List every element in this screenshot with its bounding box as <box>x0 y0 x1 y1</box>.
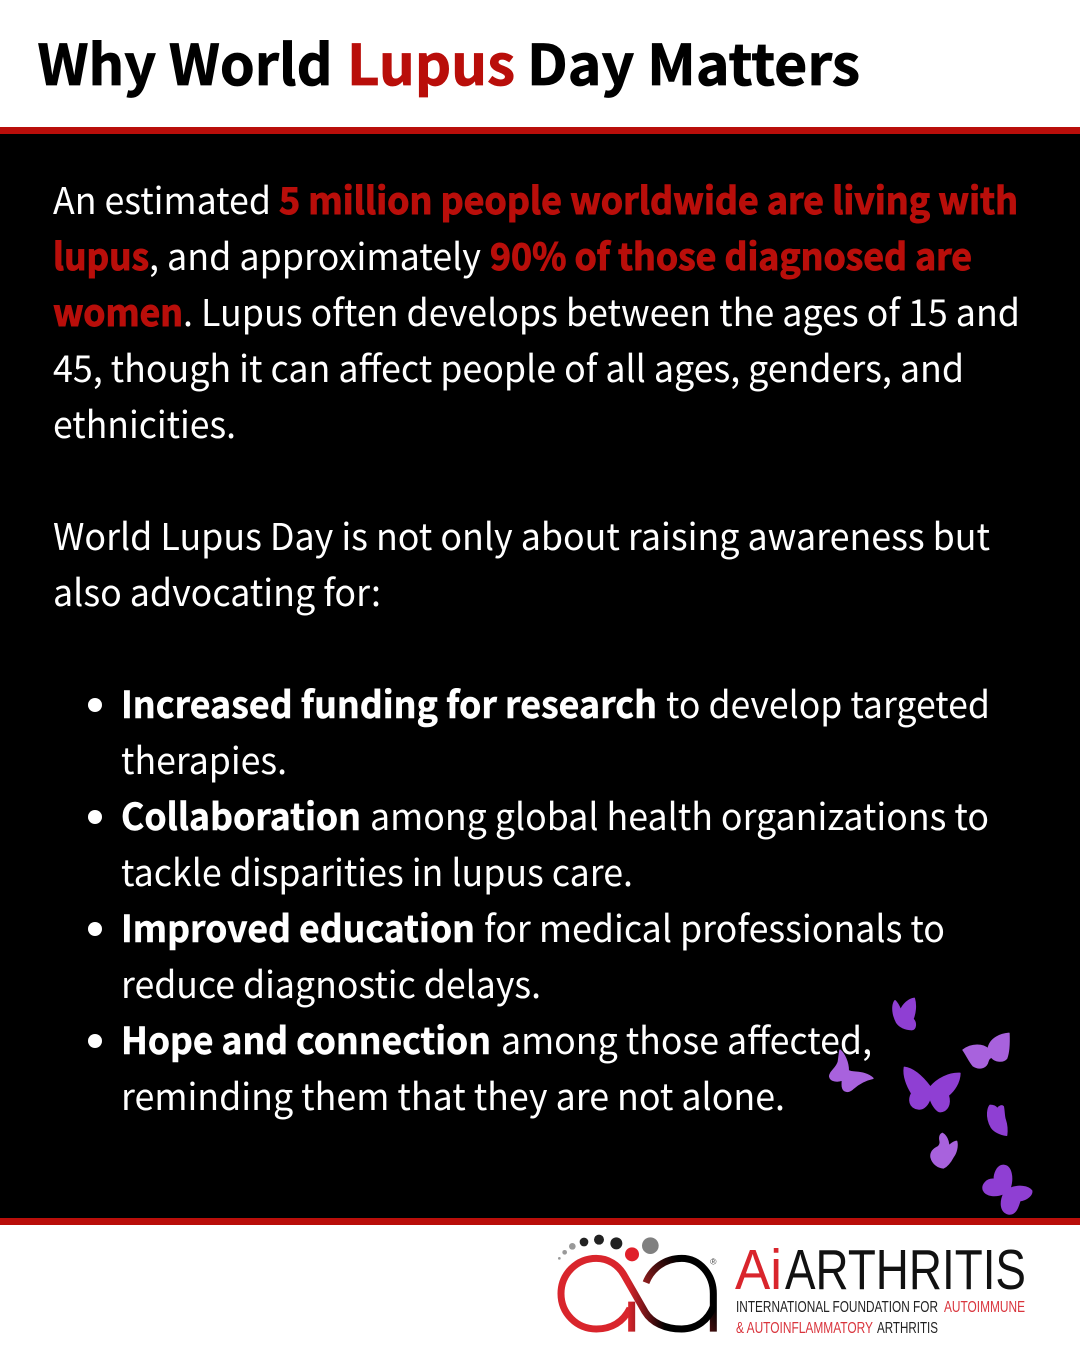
logo wordmark: INTERNATIONAL FOUNDATION FOR <box>736 1299 938 1316</box>
bullet: research funding: to develop targeted <box>666 675 990 729</box>
butterfly: bottom right <box>983 1165 1032 1214</box>
text block: lupus statistics: lupus <box>53 227 149 281</box>
butterfly: upper right <box>963 1033 1009 1068</box>
text block: lupus statistics: 90% of those diagnosed are <box>490 227 972 281</box>
text block: lupus statistics: ethnicities. <box>53 395 236 449</box>
bullet: education: for medical professionals to <box>484 899 945 953</box>
bullet: collaboration: tackle disparities in lupus care. <box>121 843 633 897</box>
text block: lupus statistics: , and approximately <box>149 227 481 281</box>
bullet: education <box>88 899 945 1009</box>
bullet: collaboration <box>88 787 989 897</box>
logo mark: infinity loop and dots: ® <box>710 1257 717 1267</box>
logo wordmark: ARTHRITIS <box>785 1238 1026 1302</box>
title <box>38 21 860 102</box>
logo wordmark: Ai <box>735 1238 782 1302</box>
bullet: research funding <box>88 675 990 785</box>
bullet list <box>88 675 990 1121</box>
bullet: collaboration: Collaboration <box>121 787 361 841</box>
logo wordmark: AUTOIMMUNE <box>944 1299 1025 1316</box>
butterfly: centre <box>904 1067 960 1112</box>
title: Day Matters <box>527 21 860 102</box>
logo mark: infinity loop and dots <box>558 1235 717 1332</box>
title: Why World <box>38 21 332 102</box>
text block: lupus statistics: 5 million people worldwide are living with <box>279 171 1018 225</box>
text block: advocacy intro: also advocating for: <box>53 563 381 617</box>
icon: purple butterflies <box>830 998 1032 1214</box>
text block: lupus statistics: An estimated <box>53 171 271 225</box>
logo wordmark: ARTHRITIS <box>877 1320 938 1337</box>
title: Lupus <box>347 21 515 102</box>
bullet: research funding: therapies. <box>121 731 287 785</box>
text block: lupus statistics <box>53 171 1020 449</box>
logo wordmark <box>735 1238 1026 1337</box>
butterfly: left <box>830 1050 873 1091</box>
butterfly: top <box>893 998 915 1030</box>
butterfly: right <box>988 1105 1007 1135</box>
bullet: hope and connection: among those affected, <box>501 1011 872 1065</box>
bullet: education: Improved education <box>121 899 475 953</box>
text block: lupus statistics: 45, though it can affect people of all ages, genders, and <box>53 339 964 393</box>
logo wordmark: & AUTOINFLAMMATORY <box>736 1320 873 1337</box>
bullet: education: reduce diagnostic delays. <box>121 955 541 1009</box>
bullet: hope and connection <box>88 1011 872 1121</box>
butterfly: lower middle <box>931 1133 957 1168</box>
bullet: collaboration: among global health organizations to <box>370 787 989 841</box>
bullet: research funding: Increased funding for research <box>121 675 657 729</box>
bullet: hope and connection: Hope and connection <box>121 1011 491 1065</box>
text block: lupus statistics: . Lupus often develops between the ages of 15 and <box>183 283 1020 337</box>
text block: lupus statistics: women <box>53 283 183 337</box>
text block: advocacy intro: World Lupus Day is not only about raising awareness but <box>53 507 990 561</box>
text block: advocacy intro <box>53 507 990 617</box>
bullet: hope and connection: reminding them that they are not alone. <box>121 1067 785 1121</box>
logo: AiArthritis <box>558 1235 1026 1337</box>
